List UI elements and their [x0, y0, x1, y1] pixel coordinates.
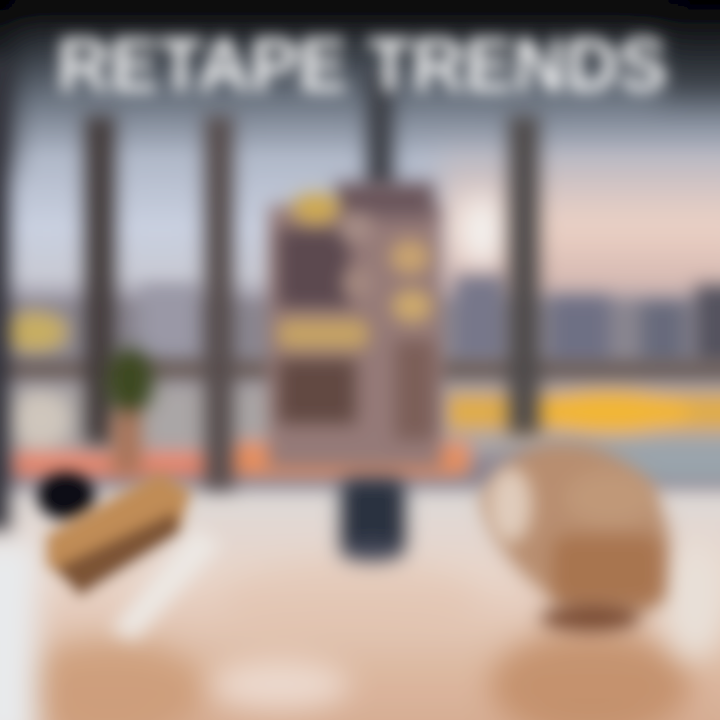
floor: [0, 490, 720, 720]
title: RETAPE TRENDS: [57, 23, 667, 108]
city skyline: [0, 275, 720, 365]
horizontal window rail: [0, 360, 720, 382]
window columns: [0, 60, 540, 530]
left sofa: [36, 471, 222, 640]
right armchair: [480, 442, 670, 632]
center stool: [340, 478, 406, 562]
central bookshelf tower: [268, 182, 442, 469]
plant: [106, 348, 154, 475]
lower window band: lit water: [0, 385, 720, 482]
